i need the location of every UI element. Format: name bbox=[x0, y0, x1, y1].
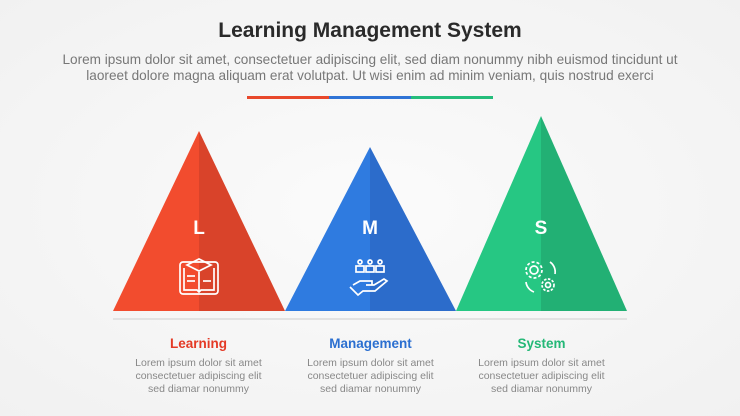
icon: book with cap bbox=[180, 259, 218, 294]
column: System: Lorem ipsum dolor sit amet bbox=[478, 357, 605, 369]
triangle: S bbox=[456, 116, 627, 311]
column: Learning bbox=[135, 336, 262, 395]
icon: hand with people bbox=[350, 260, 387, 295]
column: Management: consectetuer adipiscing elit bbox=[307, 370, 434, 382]
icon: gears bbox=[526, 262, 555, 292]
triangle: L: L bbox=[193, 218, 205, 239]
triangle: L bbox=[113, 131, 285, 311]
triangle: M: M bbox=[362, 218, 378, 239]
column: Learning: consectetuer adipiscing elit bbox=[135, 370, 262, 382]
column: Learning: Learning bbox=[170, 336, 227, 351]
column: System: consectetuer adipiscing elit bbox=[478, 370, 605, 382]
subtitle: laoreet dolore magna aliquam erat volutpat. Ut wisi enim ad minim veniam, quis nostrud exerci bbox=[86, 68, 654, 83]
column: Management bbox=[307, 336, 434, 395]
subtitle bbox=[62, 52, 678, 83]
title: Learning Management System bbox=[218, 19, 522, 42]
subtitle: Lorem ipsum dolor sit amet, consectetuer adipiscing elit, sed diam nonummy nibh euismod tincidunt ut bbox=[62, 52, 678, 67]
triangle: M bbox=[285, 147, 456, 311]
column: Management: sed diamar nonummy bbox=[320, 383, 421, 395]
triangle: S: S bbox=[535, 218, 547, 239]
color divider bbox=[247, 96, 493, 99]
column: Management: Management bbox=[329, 336, 412, 351]
column: Management: Lorem ipsum dolor sit amet bbox=[307, 357, 434, 369]
baseline bbox=[113, 318, 627, 320]
column: Learning: Lorem ipsum dolor sit amet bbox=[135, 357, 262, 369]
column: System: sed diamar nonummy bbox=[491, 383, 592, 395]
column: System: System bbox=[517, 336, 566, 351]
column: Learning: sed diamar nonummy bbox=[148, 383, 249, 395]
column: System bbox=[478, 336, 605, 395]
